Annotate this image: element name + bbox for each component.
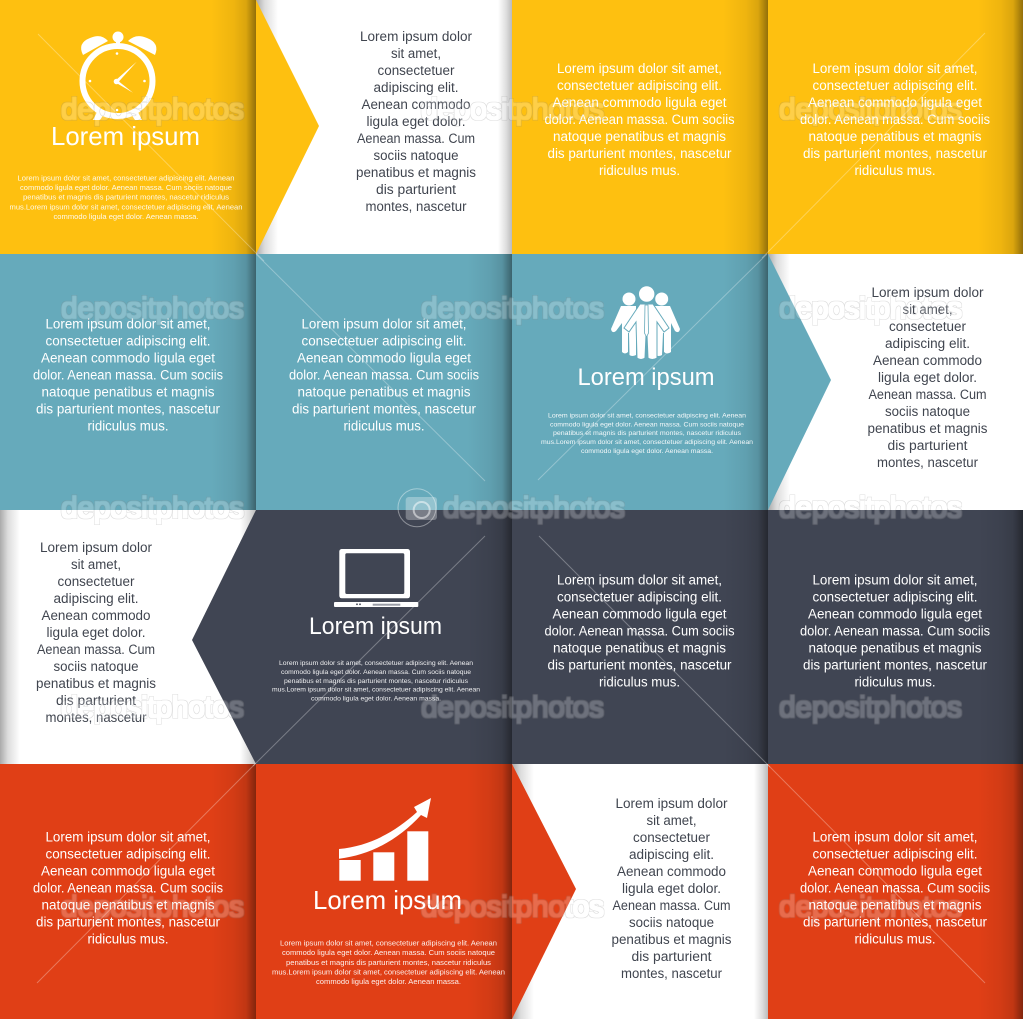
text: yellow column 4: Aenean commodo ligula eget <box>808 95 982 110</box>
watermark: depositphotos: depositphotos <box>779 890 962 924</box>
small text: yellow card: penatibus et magnis dis parturient montes, nascetur ridiculus <box>23 193 229 202</box>
small text: red card: mus.Lorem ipsum dolor sit amet, consectetuer adipiscing elit. Aenean <box>272 968 505 976</box>
text: dark column 3: ridiculus mus. <box>599 675 680 690</box>
small text: red card: Lorem ipsum dolor sit amet, consectetuer adipiscing elit. Aenean <box>280 938 497 948</box>
watermark: depositphotos: depositphotos <box>443 492 625 524</box>
text: yellow column 3: Aenean commodo ligula eget <box>552 95 727 110</box>
text: white card row 1: penatibus et magnis <box>356 165 476 180</box>
text: yellow column 4: consectetuer adipiscing elit. <box>812 78 978 93</box>
watermark: depositphotos: depositphotos <box>779 691 962 724</box>
text: dark column 3 <box>544 573 735 690</box>
text: red column 1: consectetuer adipiscing elit. <box>46 847 210 862</box>
panel: teal row <box>0 254 1023 510</box>
small text: dark card: penatibus et magnis dis parturient montes, nascetur ridiculus <box>284 678 469 685</box>
watermark: depositphotos: depositphotos <box>779 492 962 524</box>
text: white card row 1: sociis natoque <box>374 148 458 163</box>
text: red column 1: natoque penatibus et magnis <box>41 898 215 913</box>
text: yellow column 4: ridiculus mus. <box>854 163 936 178</box>
text: dark column 4: ridiculus mus. <box>854 675 936 690</box>
text: teal column 1: dolor. Aenean massa. Cum sociis <box>33 368 223 383</box>
small text: dark card: commodo ligula eget dolor. Aenean massa. Cum sociis natoque <box>281 669 471 676</box>
text: teal column 2: Lorem ipsum dolor sit amet, <box>302 317 466 332</box>
text: red column 4: dolor. Aenean massa. Cum sociis <box>800 881 990 896</box>
text: dark column 3: Aenean commodo ligula eget <box>552 607 727 622</box>
text: yellow column 3: natoque penatibus et magnis <box>553 129 726 144</box>
small text: red card: commodo ligula eget dolor. Aenean massa. <box>316 977 461 986</box>
text: red column 4: dis parturient montes, nascetur <box>803 915 988 930</box>
text: white card row 4: ligula eget dolor. <box>622 881 721 896</box>
text: dark column 3: dis parturient montes, nascetur <box>547 658 732 673</box>
text: white card row 4: montes, nascetur <box>621 966 723 981</box>
text: red column 1: dolor. Aenean massa. Cum sociis <box>33 881 223 896</box>
text: white card row 1: Aenean massa. Cum <box>357 131 475 146</box>
text: white card row 3: ligula eget dolor. <box>47 625 145 640</box>
text: dark column 4: consectetuer adipiscing elit. <box>812 590 978 605</box>
text: dark column 3: Lorem ipsum dolor sit amet, <box>557 573 722 588</box>
text: red column 1: Aenean commodo ligula eget <box>41 864 215 879</box>
text: white card row 2: consectetuer <box>889 319 967 334</box>
text: red column 4: Lorem ipsum dolor sit amet, <box>812 830 978 845</box>
text: teal column 2: dolor. Aenean massa. Cum sociis <box>289 368 479 383</box>
text: white card row 2: adipiscing elit. <box>885 336 970 351</box>
text: white card row 4: penatibus et magnis <box>612 932 732 947</box>
text: yellow column 3: ridiculus mus. <box>599 163 680 178</box>
text: yellow column 4: dolor. Aenean massa. Cum sociis <box>800 112 990 127</box>
text: white card row 4: dis parturient <box>632 949 712 964</box>
text: white card row 2: Lorem ipsum dolor <box>872 285 984 300</box>
text: white card row 3: adipiscing elit. <box>54 591 138 606</box>
small text: red card: commodo ligula eget dolor. Aenean massa. Cum sociis natoque <box>282 948 495 957</box>
text: red column 1: Lorem ipsum dolor sit amet, <box>46 830 210 845</box>
text: white card row 2: penatibus et magnis <box>868 421 988 436</box>
text: white card row 2: Aenean massa. Cum <box>868 387 986 402</box>
text: red column 4: natoque penatibus et magnis <box>808 898 982 913</box>
text: dark column 3: natoque penatibus et magnis <box>553 641 726 656</box>
text: dark column 4: Aenean commodo ligula eget <box>808 607 982 622</box>
text: white card row 4: adipiscing elit. <box>629 847 714 862</box>
text: white card row 1: Lorem ipsum dolor <box>360 29 473 44</box>
small text: teal card <box>541 412 753 455</box>
text: white card row 3: sociis natoque <box>54 659 138 674</box>
watermark: depositphotos: depositphotos <box>779 292 962 325</box>
text: dark column 4: Lorem ipsum dolor sit amet, <box>812 573 978 588</box>
small text: teal card: commodo ligula eget dolor. Aenean massa. <box>581 448 713 455</box>
text: yellow column 4 <box>800 61 990 178</box>
text: teal column 2 <box>289 317 479 434</box>
text: white card row 3 <box>36 540 156 725</box>
text: yellow column 4: dis parturient montes, nascetur <box>803 146 988 161</box>
text: dark column 4: dolor. Aenean massa. Cum sociis <box>800 624 990 639</box>
panel: yellow row <box>0 0 1023 254</box>
text: white card row 4 <box>612 796 732 981</box>
text: yellow column 4: natoque penatibus et magnis <box>808 129 982 144</box>
text: white card row 2: montes, nascetur <box>877 455 979 470</box>
text: white card row 3: Lorem ipsum dolor <box>40 540 153 555</box>
text: yellow column 3: dis parturient montes, nascetur <box>547 146 732 161</box>
watermark: depositphotos: depositphotos <box>421 292 604 325</box>
text: dark column 4 <box>800 573 990 690</box>
text: teal column 1: ridiculus mus. <box>88 419 168 434</box>
text: white card row 1: dis parturient <box>376 182 456 197</box>
text: red column 1 <box>33 830 223 947</box>
heading: dark card: Lorem ipsum <box>309 613 442 640</box>
text: white card row 3: penatibus et magnis <box>36 676 156 691</box>
text: yellow column 3: Lorem ipsum dolor sit amet, <box>557 61 722 76</box>
small text: dark card: mus.Lorem ipsum dolor sit amet, consectetuer adipiscing elit. Aenean <box>272 686 480 694</box>
text: white card row 1: consectetuer <box>378 63 455 78</box>
panel: red row <box>0 764 1023 1019</box>
text: white card row 2: sociis natoque <box>885 404 970 419</box>
text: red column 4: Aenean commodo ligula eget <box>808 864 982 879</box>
text: teal column 1: natoque penatibus et magnis <box>41 385 215 400</box>
text: yellow column 3 <box>544 61 735 178</box>
text: white card row 3: dis parturient <box>56 693 136 708</box>
text: white card row 1: Aenean commodo <box>362 97 470 112</box>
text: teal column 1: dis parturient montes, nascetur <box>36 402 221 417</box>
text: teal column 2: ridiculus mus. <box>344 419 424 434</box>
text: white card row 3: montes, nascetur <box>46 710 147 725</box>
text: white card row 2: dis parturient <box>888 438 968 453</box>
small text: yellow card: commodo ligula eget dolor. Aenean massa. Cum sociis natoque <box>20 183 232 192</box>
text: red column 4: consectetuer adipiscing elit. <box>812 847 978 862</box>
text: teal column 2: dis parturient montes, nascetur <box>292 402 477 417</box>
small text: teal card: mus.Lorem ipsum dolor sit amet, consectetuer adipiscing elit. Aenean <box>541 439 753 446</box>
text: white card row 4: sociis natoque <box>629 915 714 930</box>
watermark: depositphotos: depositphotos <box>421 93 604 126</box>
small text: red card: penatibus et magnis dis parturient montes, nascetur ridiculus <box>286 958 491 967</box>
small text: dark card: Lorem ipsum dolor sit amet, consectetuer adipiscing elit. Aenean <box>279 660 473 667</box>
small text: yellow card: mus.Lorem ipsum dolor sit amet, consectetuer adipiscing elit. Aenean <box>10 202 242 211</box>
text: white card row 4: Aenean massa. Cum <box>612 898 730 913</box>
text: white card row 3: Aenean massa. Cum <box>37 642 155 657</box>
text: white card row 4: consectetuer <box>633 830 711 845</box>
text: teal column 2: Aenean commodo ligula eget <box>297 351 471 366</box>
text: teal column 1 <box>33 317 223 434</box>
small text: yellow card: commodo ligula eget dolor. Aenean massa. <box>54 212 198 221</box>
small text: yellow card: Lorem ipsum dolor sit amet, consectetuer adipiscing elit. Aenean <box>18 174 234 182</box>
icon: business people <box>611 286 680 360</box>
text: white card row 2: sit amet, <box>902 302 952 317</box>
text: teal column 1: Lorem ipsum dolor sit amet, <box>46 317 210 332</box>
text: yellow column 4: Lorem ipsum dolor sit amet, <box>812 61 978 76</box>
icon: growth chart <box>339 798 431 881</box>
text: white card row 4: Aenean commodo <box>617 864 726 879</box>
text: white card row 3: consectetuer <box>58 574 135 589</box>
small text: teal card: commodo ligula eget dolor. Aenean massa. Cum sociis natoque <box>550 422 744 428</box>
text: white card row 3: Aenean commodo <box>42 608 150 623</box>
watermark: depositphotos: depositphotos <box>421 691 604 724</box>
watermark: depositphotos: depositphotos <box>61 691 244 724</box>
text: teal column 2: consectetuer adipiscing elit. <box>302 334 466 349</box>
text: red column 1: ridiculus mus. <box>88 932 168 947</box>
watermark: depositphotos: depositphotos <box>421 890 604 924</box>
icon: alarm clock <box>81 32 156 120</box>
text: white card row 2: ligula eget dolor. <box>878 370 977 385</box>
text: white card row 2: Aenean commodo <box>873 353 982 368</box>
text: yellow column 3: dolor. Aenean massa. Cum sociis <box>544 112 735 127</box>
text: teal column 1: Aenean commodo ligula eget <box>41 351 215 366</box>
small text: teal card: Lorem ipsum dolor sit amet, consectetuer adipiscing elit. Aenean <box>548 412 746 420</box>
heading: teal card: Lorem ipsum <box>578 364 714 391</box>
text: white card row 1: adipiscing elit. <box>374 80 458 95</box>
text: teal column 1: consectetuer adipiscing elit. <box>46 334 210 349</box>
small text: dark card: commodo ligula eget dolor. Aenean massa. <box>311 696 441 702</box>
text: yellow column 3: consectetuer adipiscing elit. <box>557 78 722 93</box>
text: red column 4: ridiculus mus. <box>854 932 936 947</box>
small text: dark card <box>272 660 480 702</box>
text: white card row 3: sit amet, <box>71 557 121 572</box>
text: white card row 1: montes, nascetur <box>366 199 467 214</box>
text: dark column 4: dis parturient montes, nascetur <box>803 658 988 673</box>
text: white card row 4: Lorem ipsum dolor <box>616 796 728 811</box>
small text: yellow card <box>10 174 242 221</box>
watermark: depositphotos: depositphotos <box>61 492 244 524</box>
small text: teal card: penatibus et magnis dis parturient montes, nascetur ridiculus <box>553 430 742 437</box>
watermark: depositphotos: depositphotos <box>61 93 244 126</box>
text: white card row 2 <box>868 285 988 470</box>
text: white card row 1: ligula eget dolor. <box>367 114 465 129</box>
text: dark column 3: dolor. Aenean massa. Cum sociis <box>544 624 735 639</box>
panel: dark row <box>0 510 1023 764</box>
text: teal column 2: natoque penatibus et magnis <box>297 385 471 400</box>
watermark: depositphotos <box>61 93 962 924</box>
text: red column 1: dis parturient montes, nascetur <box>36 915 221 930</box>
watermark: depositphotos: depositphotos <box>61 890 244 924</box>
heading: red card: Lorem ipsum <box>313 885 462 915</box>
heading: yellow card: Lorem ipsum <box>51 121 200 151</box>
text: red column 4 <box>800 830 990 947</box>
text: white card row 4: sit amet, <box>646 813 696 828</box>
text: white card row 1: sit amet, <box>391 46 441 61</box>
watermark: depositphotos: depositphotos <box>779 93 962 126</box>
watermark: depositphotos: depositphotos <box>61 292 244 325</box>
text: dark column 4: natoque penatibus et magnis <box>808 641 982 656</box>
text: white card row 1 <box>356 29 476 214</box>
icon: watermark camera <box>398 489 437 527</box>
small text: red card <box>272 938 505 986</box>
icon: laptop <box>334 549 418 607</box>
text: dark column 3: consectetuer adipiscing elit. <box>557 590 722 605</box>
